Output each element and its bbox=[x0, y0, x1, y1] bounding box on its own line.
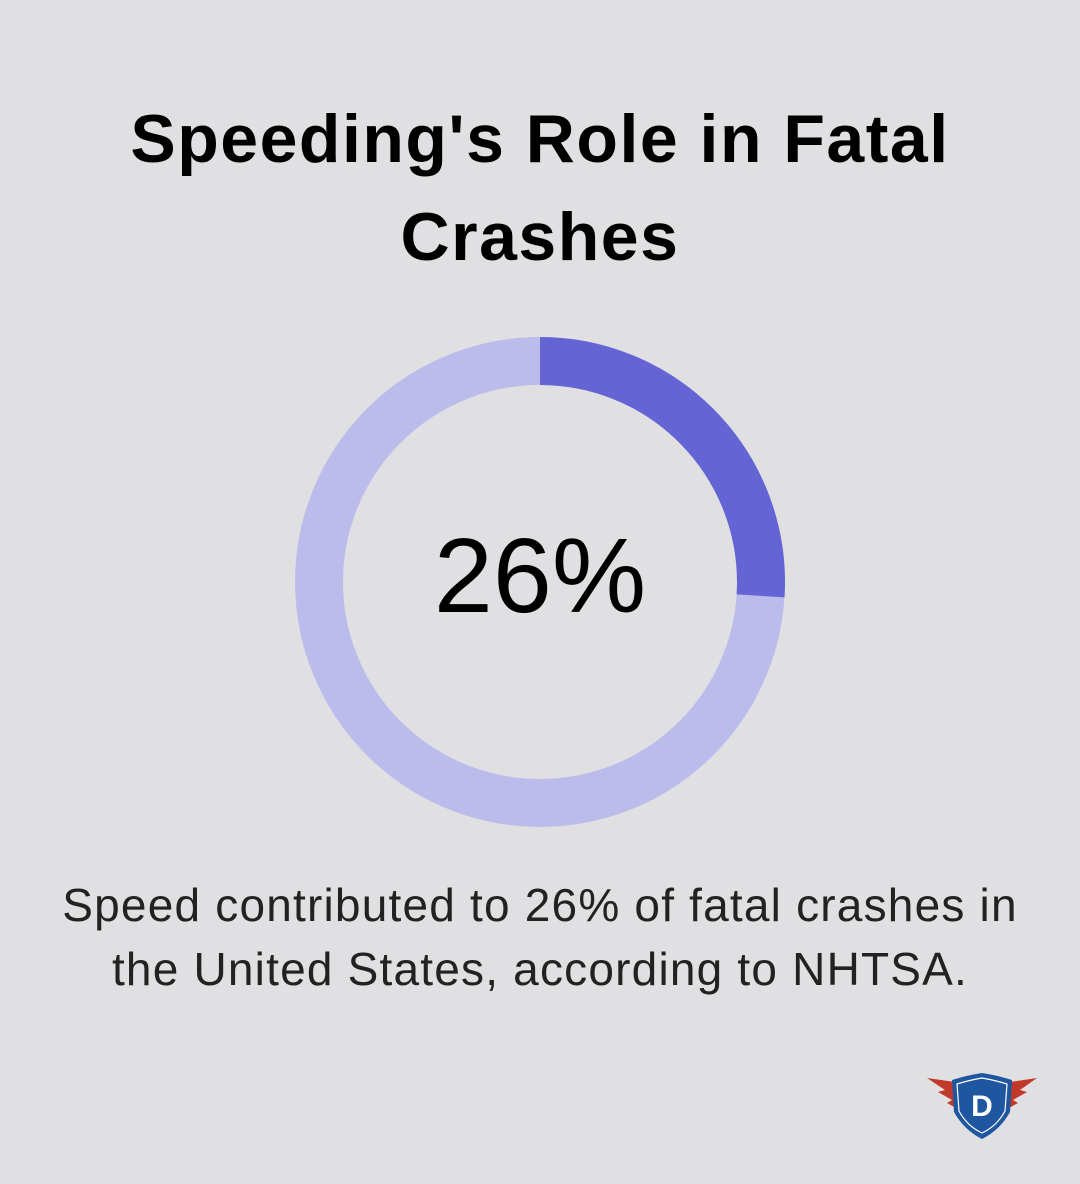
icon: logo: D bbox=[971, 1090, 993, 1123]
title: Crashes bbox=[401, 199, 679, 275]
description: Speed contributed to 26% of fatal crashes in bbox=[62, 879, 1018, 931]
icon: logo bbox=[927, 1073, 1037, 1139]
center value: 26% bbox=[434, 517, 646, 635]
title bbox=[130, 101, 950, 275]
description bbox=[62, 879, 1018, 995]
title: Speeding's Role in Fatal bbox=[130, 101, 950, 177]
description: the United States, according to NHTSA. bbox=[112, 943, 968, 995]
